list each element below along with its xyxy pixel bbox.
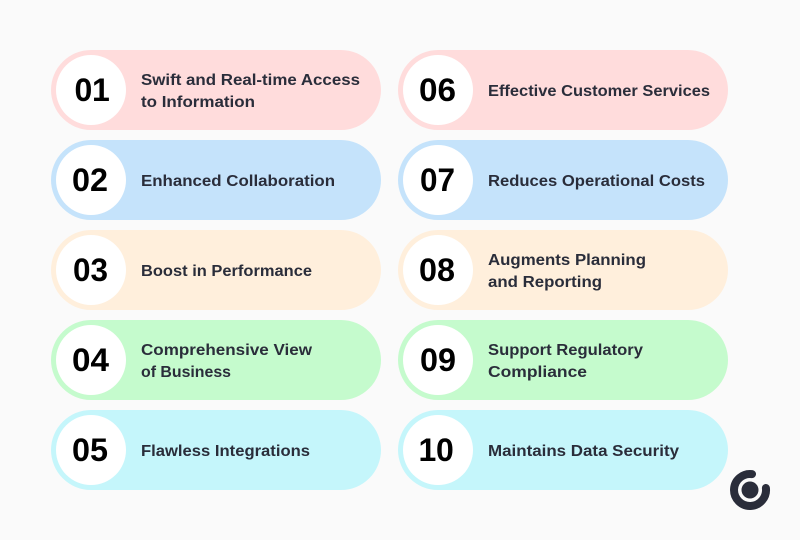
- panel: item 07: Reduces Operational Costs: [488, 173, 705, 190]
- panel: item 03: Boost in Performance: [141, 263, 312, 280]
- panel: item 06: [398, 50, 728, 130]
- panel: item 04: [51, 320, 381, 400]
- panel: item 02: 02: [72, 162, 108, 198]
- panel: item 01: [51, 50, 381, 130]
- panel: item 05: 05: [72, 432, 108, 468]
- panel: item 05: Flawless Integrations: [141, 443, 310, 460]
- panel: item 10: 10: [418, 432, 454, 468]
- panel: item 02: [51, 140, 381, 220]
- panel: item 08: and Reporting: [488, 274, 602, 291]
- panel: item 09: 09: [420, 342, 456, 378]
- icon: logo: [734, 474, 766, 506]
- panel: item 07: 07: [420, 162, 455, 198]
- panel: item 01: to Information: [141, 94, 255, 111]
- panel: item 04: 04: [72, 342, 109, 378]
- panel: item 05: [51, 410, 381, 490]
- panel: item 10: Maintains Data Security: [488, 443, 679, 460]
- panel: item 03: 03: [73, 252, 108, 288]
- panel: item 08: [398, 230, 728, 310]
- panel: item 04: Comprehensive View: [141, 342, 313, 359]
- panel: item 04: of Business: [141, 364, 231, 381]
- panel: item 10: [398, 410, 728, 490]
- panel: item 08: 08: [419, 252, 455, 288]
- panel: item 06: Effective Customer Services: [488, 83, 710, 100]
- panel: item 07: [398, 140, 728, 220]
- panel: item 09: [398, 320, 728, 400]
- panel: item 03: [51, 230, 381, 310]
- panel: item 02: Enhanced Collaboration: [141, 173, 335, 190]
- panel: item 01: Swift and Real-time Access: [141, 72, 360, 89]
- panel: item 08: Augments Planning: [488, 252, 646, 269]
- panel: item 09: Compliance: [488, 364, 587, 381]
- panel: item 01: 01: [74, 72, 110, 108]
- panel: item 06: 06: [419, 72, 456, 108]
- panel: item 09: Support Regulatory: [488, 342, 643, 359]
